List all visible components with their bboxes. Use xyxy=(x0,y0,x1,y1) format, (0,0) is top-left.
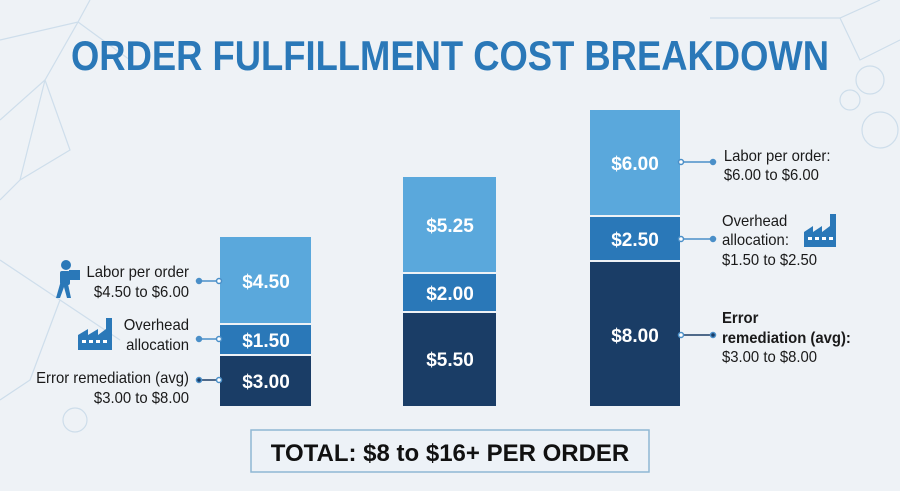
right labels: $6.00 to $6.00 xyxy=(724,167,819,184)
right labels: Labor per order: xyxy=(724,148,830,165)
right labels: Error xyxy=(722,310,758,327)
total box: TOTAL: $8 to $16+ PER ORDER xyxy=(271,440,629,467)
bar 2: $5.25 xyxy=(426,216,474,237)
left labels: $3.00 to $8.00 xyxy=(94,390,189,407)
right labels: $3.00 to $8.00 xyxy=(722,349,817,366)
right labels: Overhead xyxy=(722,213,787,230)
right labels xyxy=(678,148,851,366)
right labels: $1.50 to $2.50 xyxy=(722,252,817,269)
icon: worker xyxy=(56,260,80,298)
left labels: Overhead xyxy=(124,317,189,334)
icon: factory left xyxy=(78,318,112,350)
bar 2 xyxy=(403,177,496,406)
right labels: allocation: xyxy=(722,232,789,249)
bar 2: $2.00 xyxy=(426,284,474,305)
bar 3: $2.50 xyxy=(611,230,659,251)
bar 1: $1.50 xyxy=(242,331,290,352)
left labels xyxy=(36,264,222,407)
bar 3: $6.00 xyxy=(611,154,659,175)
total box xyxy=(251,430,649,472)
left labels: Labor per order xyxy=(87,264,189,281)
bar 3 xyxy=(590,110,680,406)
left labels: $4.50 to $6.00 xyxy=(94,284,189,301)
icon: factory right xyxy=(804,214,836,247)
bar 1: $3.00 xyxy=(242,372,290,393)
bar 3: $8.00 xyxy=(611,326,659,347)
bar 2: $5.50 xyxy=(426,350,474,371)
bar 1: $4.50 xyxy=(242,272,290,293)
bar 1 xyxy=(220,237,311,406)
right labels: remediation (avg): xyxy=(722,330,851,347)
left labels: Error remediation (avg) xyxy=(36,370,189,387)
left labels: allocation xyxy=(126,337,189,354)
